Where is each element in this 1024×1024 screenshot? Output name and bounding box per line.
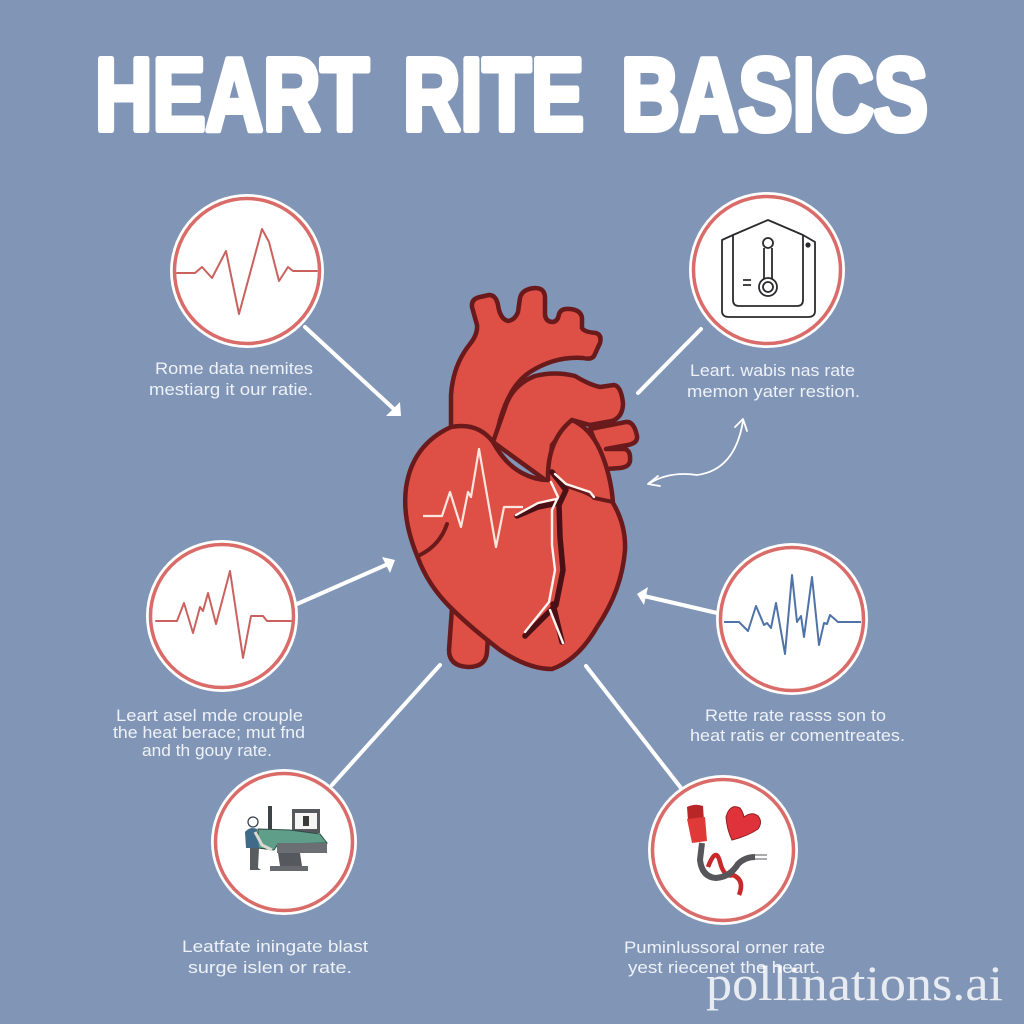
circle badge <box>689 192 845 348</box>
aorta <box>451 288 600 445</box>
title <box>95 37 928 152</box>
icon: plug and heart <box>687 805 767 895</box>
panel: bottom left machine <box>182 769 368 977</box>
caption <box>113 706 305 760</box>
caption: Leart asel mde crouple <box>116 706 303 725</box>
heart body <box>405 420 625 669</box>
caption: surge islen or rate. <box>188 958 352 977</box>
caption: Leatfate iningate blast <box>182 937 368 956</box>
circle badge <box>146 540 298 692</box>
caption: Leart. wabis nas rate <box>690 361 855 380</box>
arrow: bottom right connector <box>586 666 681 788</box>
panel: middle right pulse <box>690 543 905 745</box>
heart pulse line <box>423 449 523 547</box>
arrow: top left to heart <box>305 327 401 416</box>
caption <box>690 706 905 745</box>
arrow: middle right to heart <box>637 587 717 613</box>
circle badge <box>170 194 324 348</box>
panel: bottom right cable and heart <box>624 775 825 977</box>
circle badge <box>211 769 357 915</box>
central heart illustration <box>405 288 637 669</box>
left ventricle crease <box>420 524 447 555</box>
title: BASICS <box>621 37 928 152</box>
caption: mestiarg it our ratie. <box>149 380 313 399</box>
watermark: pollinations.ai <box>706 955 1003 1011</box>
arrow: middle left to heart <box>297 557 395 604</box>
panel: top right thermometer <box>687 192 860 401</box>
arrow: curved double-headed <box>648 419 747 486</box>
caption: the heat berace; mut fnd <box>113 723 305 742</box>
right chamber divider <box>566 486 613 502</box>
icon: thermometer in house <box>722 220 815 317</box>
panel: middle left pulse <box>113 540 305 760</box>
icon: person at machine <box>245 806 327 871</box>
coronary crack: highlight <box>516 474 594 643</box>
pulmonary veins <box>590 422 637 469</box>
caption: and th gouy rate. <box>142 741 272 760</box>
caption: heat ratis er comentreates. <box>690 726 905 745</box>
circle badge <box>648 775 798 925</box>
circle badge <box>716 543 868 695</box>
coronary crack: dark <box>517 472 566 642</box>
caption: yest riecenet the heart. <box>628 958 820 977</box>
title: RITE <box>403 37 584 152</box>
vena cava <box>449 608 488 667</box>
caption <box>149 359 313 399</box>
caption: Puminlussoral orner rate <box>624 938 825 957</box>
caption <box>624 938 825 977</box>
caption <box>687 361 860 401</box>
arrow: top right connector <box>638 329 701 393</box>
title: HEART <box>95 37 369 152</box>
pulse wave <box>156 571 291 658</box>
pulse wave <box>724 575 861 654</box>
pulmonary artery <box>493 374 623 482</box>
arrow: bottom left connector <box>332 665 440 785</box>
pulse wave <box>177 229 317 314</box>
caption: Rome data nemites <box>155 359 313 378</box>
caption <box>182 937 368 977</box>
caption: Rette rate rasss son to <box>705 706 886 725</box>
caption: memon yater restion. <box>687 382 860 401</box>
panel: top left pulse <box>149 194 324 399</box>
